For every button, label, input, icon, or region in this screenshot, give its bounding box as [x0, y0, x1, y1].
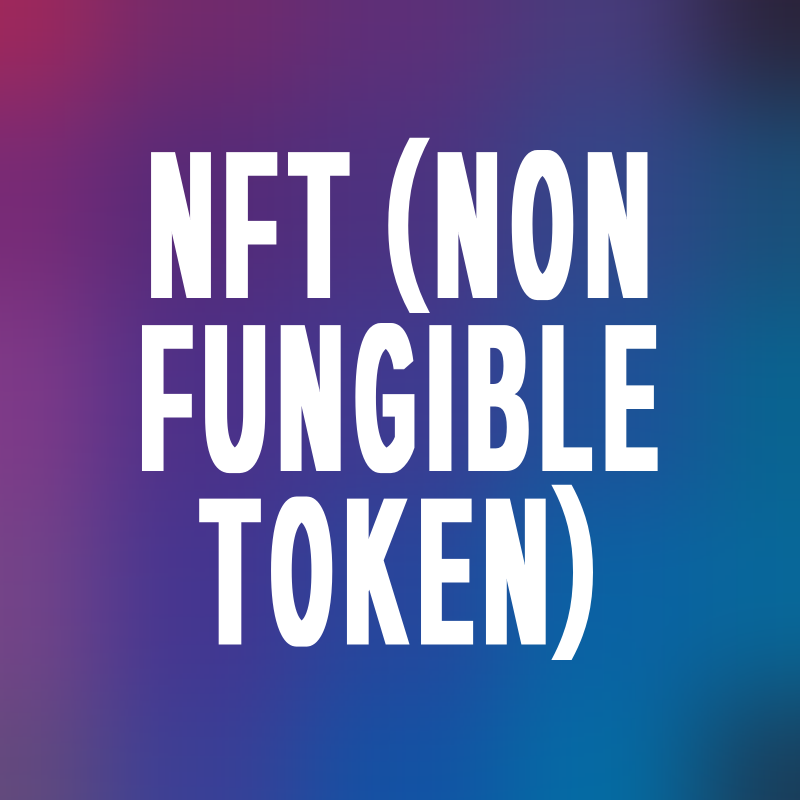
title line 3: K	[346, 454, 405, 691]
title line 2: L	[542, 280, 589, 516]
title line 1	[150, 104, 648, 344]
title line 2: U	[205, 280, 265, 517]
title line 2: B	[468, 280, 528, 517]
title line 1: F	[226, 108, 275, 344]
title line 1: N	[150, 108, 212, 344]
title line 1: N	[587, 108, 648, 344]
title line 1: T	[292, 107, 346, 344]
title	[142, 104, 656, 691]
title line 3	[203, 451, 600, 691]
title line 2: E	[606, 279, 656, 516]
title line 2: I	[429, 280, 452, 517]
title line 1: (	[381, 104, 431, 314]
title line 2: G	[357, 280, 414, 516]
title line 3: )	[551, 451, 600, 661]
title line 3: E	[421, 453, 471, 690]
title line 2: F	[142, 279, 191, 516]
title line 3: N	[485, 454, 546, 690]
title line 1: N	[437, 107, 498, 344]
title line 2	[142, 279, 656, 517]
title line 1: O	[514, 106, 571, 343]
title line 2: N	[280, 281, 341, 517]
title line 3: O	[273, 452, 330, 690]
title line 3: T	[203, 454, 257, 690]
